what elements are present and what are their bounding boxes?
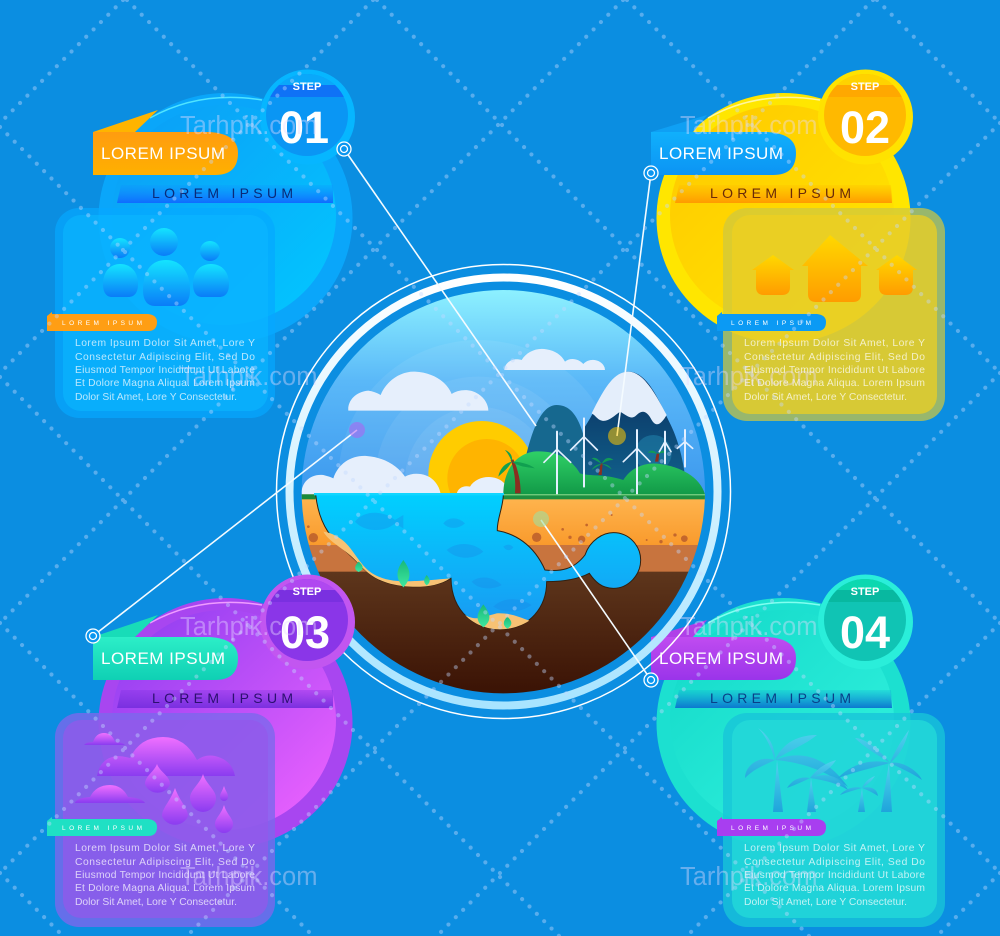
title bar 03: LOREM IPSUM bbox=[152, 690, 297, 706]
connector 01 bbox=[344, 149, 536, 426]
watermarks: Tarhpik.com bbox=[680, 863, 817, 891]
panel: step 02 bbox=[651, 70, 945, 421]
connector endpoints bbox=[86, 142, 658, 687]
small ribbon 03: LOREM IPSUM bbox=[62, 825, 142, 832]
body text 03: Dolor Sit Amet, Lore Y Consectetur. bbox=[75, 897, 237, 908]
body text 01: Dolor Sit Amet, Lore Y Consectetur. bbox=[75, 392, 237, 403]
watermarks: Tarhpik.com bbox=[180, 613, 317, 641]
ribbon 02 bbox=[651, 115, 796, 175]
body text 01: Lorem Ipsum Dolor Sit Amet, Lore Y bbox=[75, 338, 255, 349]
body text 01: Consectetur Adipiscing Elit, Sed Do bbox=[75, 352, 255, 363]
wind turbines bbox=[544, 418, 693, 494]
step badge 03 bbox=[260, 574, 355, 670]
ribbon 03 bbox=[93, 615, 238, 680]
glass box 01 bbox=[55, 208, 275, 418]
small ribbon 01 bbox=[47, 312, 157, 331]
connector 03 bbox=[93, 430, 357, 636]
glow points bbox=[349, 422, 626, 527]
body text 02: Dolor Sit Amet, Lore Y Consectetur. bbox=[744, 392, 907, 403]
small ribbon 02: LOREM IPSUM bbox=[731, 320, 811, 327]
title bar 04 bbox=[675, 690, 892, 708]
small ribbon 02 bbox=[717, 312, 826, 331]
palm trees behind bbox=[592, 451, 667, 475]
glass box 02 bbox=[723, 208, 945, 421]
title bar 02: LOREM IPSUM bbox=[710, 185, 855, 201]
ribbon 03: LOREM IPSUM bbox=[101, 649, 225, 668]
step badge 01 bbox=[260, 70, 355, 164]
globe rings bbox=[276, 264, 730, 718]
watermarks: Tarhpik.com bbox=[680, 613, 817, 641]
large circle 03 bbox=[98, 598, 352, 848]
body text 01: Eiusmod Tempor Incididunt Ut Labore bbox=[75, 365, 255, 376]
title bar 01: LOREM IPSUM bbox=[152, 185, 297, 201]
step badge 02 bbox=[818, 70, 913, 164]
sand bbox=[323, 532, 529, 629]
small ribbon 04: LOREM IPSUM bbox=[731, 825, 811, 832]
watermarks: Tarhpik.com bbox=[180, 863, 317, 891]
body text 03: Et Dolore Magna Aliqua. Lorem Ipsum bbox=[75, 883, 255, 894]
connector 02 bbox=[617, 173, 651, 436]
step badge 04 bbox=[818, 574, 913, 670]
body text 01 bbox=[75, 338, 255, 403]
step badge 03: 03 bbox=[280, 607, 330, 658]
body text 04: Dolor Sit Amet, Lore Y Consectetur. bbox=[744, 897, 907, 908]
body text 02: Eiusmod Tempor Incididunt Ut Labore bbox=[744, 365, 925, 376]
step badge 02: 02 bbox=[840, 102, 890, 153]
watermarks: Tarhpik.com bbox=[180, 363, 317, 391]
target 03 bbox=[86, 629, 100, 643]
ribbon 01 bbox=[93, 110, 238, 175]
hills bbox=[503, 451, 705, 494]
body text 04: Consectetur Adipiscing Elit, Sed Do bbox=[744, 857, 925, 868]
title bar 02 bbox=[675, 185, 892, 203]
large circle 04 bbox=[656, 598, 910, 848]
small ribbon 03 bbox=[47, 817, 157, 836]
panel: step 04 bbox=[651, 574, 945, 927]
mountains bbox=[518, 372, 687, 494]
icon: clouds and rain bbox=[75, 733, 235, 833]
step badge 04: STEP bbox=[851, 586, 879, 598]
cloud small bbox=[504, 349, 605, 370]
watermarks bbox=[180, 112, 817, 891]
step badge 02: STEP bbox=[851, 81, 879, 93]
body text 04: Et Dolore Magna Aliqua. Lorem Ipsum bbox=[744, 883, 925, 894]
sea plants bbox=[355, 560, 511, 629]
body text 02: Lorem Ipsum Dolor Sit Amet, Lore Y bbox=[744, 338, 925, 349]
watermarks: Tarhpik.com bbox=[680, 112, 817, 140]
body text 03: Consectetur Adipiscing Elit, Sed Do bbox=[75, 857, 255, 868]
title bar 04: LOREM IPSUM bbox=[710, 690, 855, 706]
title bar 03 bbox=[117, 690, 333, 708]
body text 04 bbox=[744, 843, 925, 908]
grass strip bbox=[298, 494, 710, 499]
step badge 04: 04 bbox=[840, 607, 890, 658]
body text 02 bbox=[744, 338, 925, 403]
water surface line bbox=[314, 493, 504, 495]
cloud left bbox=[302, 456, 441, 494]
soil layers bbox=[297, 494, 710, 695]
icon: palm trees bbox=[745, 728, 922, 812]
glass box 03 bbox=[55, 713, 275, 927]
ribbon 04: LOREM IPSUM bbox=[659, 649, 783, 668]
large circle 01 bbox=[98, 93, 352, 343]
small ribbon 01: LOREM IPSUM bbox=[62, 320, 142, 327]
watermarks: Tarhpik.com bbox=[180, 112, 317, 140]
ribbon 02: LOREM IPSUM bbox=[659, 144, 783, 163]
sky bbox=[300, 288, 707, 495]
body text 04: Eiusmod Tempor Incididunt Ut Labore bbox=[744, 870, 925, 881]
glass box 04 bbox=[723, 713, 945, 927]
connector 04 bbox=[541, 520, 651, 680]
soil pebbles bbox=[307, 514, 688, 543]
body text 03: Eiusmod Tempor Incididunt Ut Labore bbox=[75, 870, 255, 881]
fish bbox=[355, 513, 532, 611]
icon: houses bbox=[752, 235, 917, 302]
step badge 01: 01 bbox=[279, 102, 329, 153]
sun bbox=[428, 421, 528, 494]
panel: step 01 bbox=[47, 70, 355, 418]
ribbon 01: LOREM IPSUM bbox=[101, 144, 225, 163]
cloud near sun bbox=[457, 477, 505, 494]
icon: people bbox=[103, 228, 229, 306]
body text 02: Consectetur Adipiscing Elit, Sed Do bbox=[744, 352, 925, 363]
target 01 bbox=[337, 142, 351, 156]
large circle 02 bbox=[656, 93, 910, 343]
landscape scene bbox=[297, 288, 710, 695]
step badge 03: STEP bbox=[293, 586, 321, 598]
body text 01: Et Dolore Magna Aliqua. Lorem Ipsum bbox=[75, 378, 255, 389]
body text 02: Et Dolore Magna Aliqua. Lorem Ipsum bbox=[744, 378, 925, 389]
sky halos bbox=[340, 340, 596, 476]
small ribbon 04 bbox=[717, 817, 826, 836]
central globe bbox=[276, 264, 730, 718]
target 04 bbox=[644, 673, 658, 687]
palm tree front bbox=[498, 450, 535, 493]
body text 03: Lorem Ipsum Dolor Sit Amet, Lore Y bbox=[75, 843, 255, 854]
water bbox=[316, 494, 641, 629]
target 02 bbox=[644, 166, 658, 180]
body text 04: Lorem Ipsum Dolor Sit Amet, Lore Y bbox=[744, 843, 925, 854]
connector lines bbox=[93, 149, 651, 680]
step badge 01: STEP bbox=[293, 81, 321, 93]
panel: step 03 bbox=[47, 598, 352, 927]
cloud large bbox=[348, 372, 488, 411]
ribbon 04 bbox=[651, 620, 796, 680]
body text 03 bbox=[75, 843, 255, 908]
title bar 01 bbox=[117, 185, 333, 203]
watermarks: Tarhpik.com bbox=[680, 363, 817, 391]
